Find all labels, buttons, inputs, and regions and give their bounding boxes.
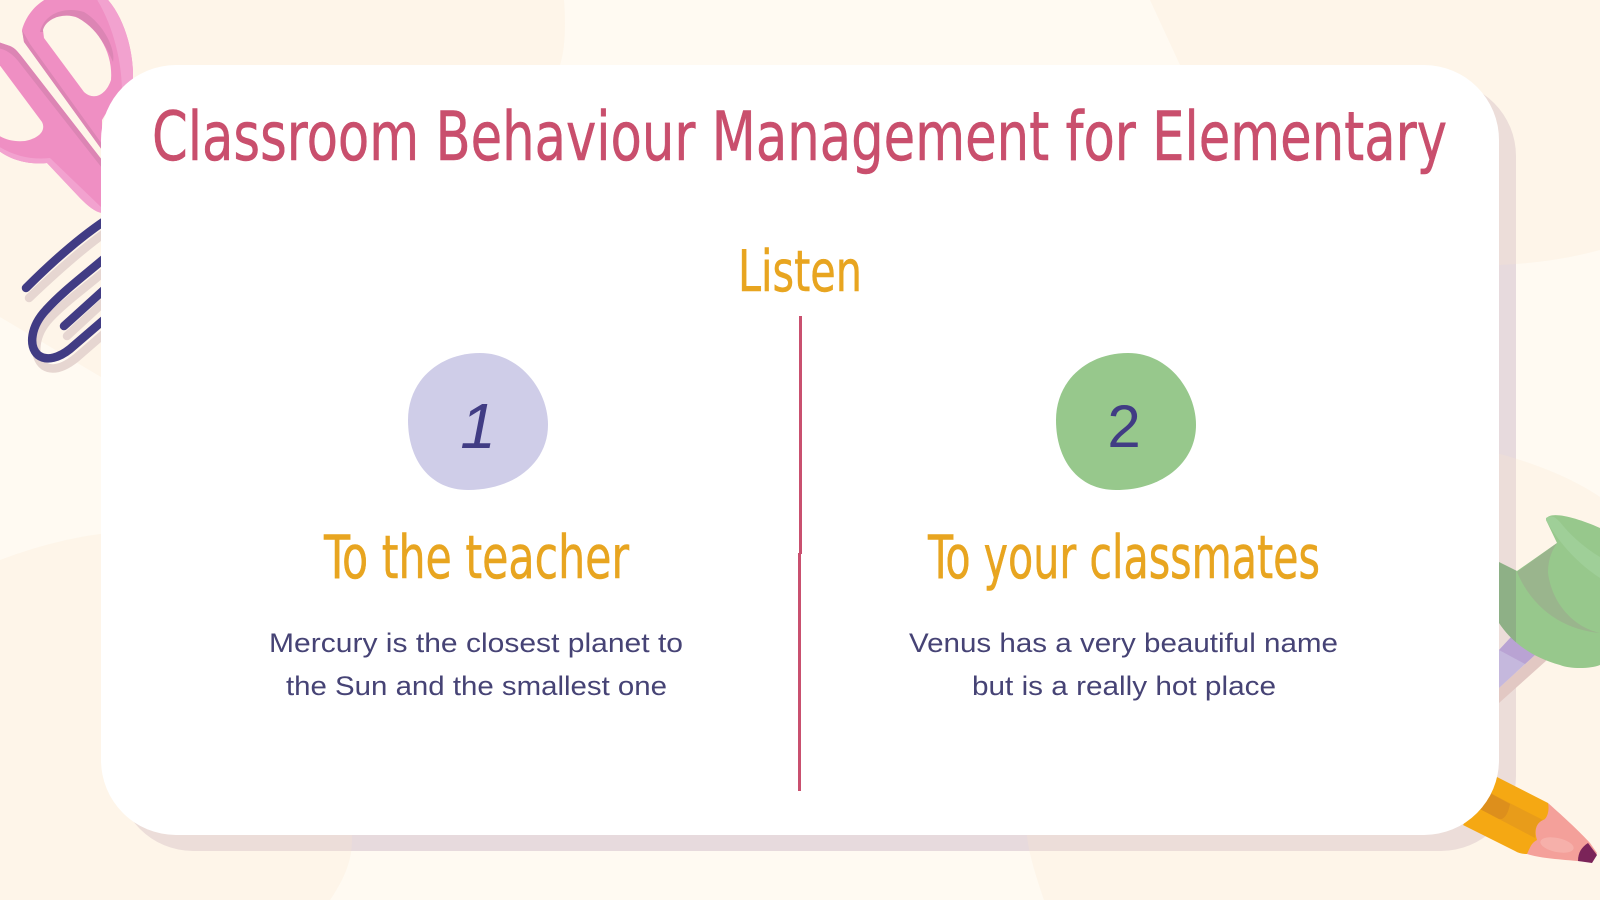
scissors upper handle light edge <box>92 0 133 92</box>
plant lid highlight <box>1546 516 1600 578</box>
paperclip <box>26 220 106 358</box>
icon: scissors <box>0 0 133 368</box>
scissors upper handle <box>22 0 133 150</box>
icon: pencil <box>1463 777 1597 863</box>
scissors lower handle light edge <box>0 146 102 213</box>
pencil dark band <box>1478 793 1510 819</box>
column: to the teacher <box>269 353 683 701</box>
description: but is a really hot place <box>972 671 1276 701</box>
divider line <box>798 316 802 791</box>
description <box>909 628 1338 701</box>
scissors lower handle hole <box>0 63 43 141</box>
pencil body stripe <box>1478 793 1543 838</box>
heading: to your classmates: To your classmates <box>927 523 1320 593</box>
column: to your classmates <box>909 353 1338 701</box>
heading: to the teacher: To the teacher <box>323 523 630 593</box>
pencil lead <box>1578 843 1597 863</box>
plant body <box>1499 515 1600 668</box>
card shadow <box>118 81 1516 851</box>
number 1: 1 <box>460 390 496 462</box>
icon: plant pot <box>1499 510 1600 703</box>
scissors upper handle edge shade <box>22 30 102 150</box>
scissors lower handle shade <box>0 42 102 168</box>
paperclip shadow <box>29 232 106 368</box>
pencil tip wood <box>1527 803 1597 862</box>
scissors lower handle <box>0 42 102 213</box>
heading: Listen: Listen <box>738 239 862 305</box>
number 2: 2 <box>1107 393 1141 460</box>
description: Mercury is the closest planet to <box>269 628 683 658</box>
pencil body <box>1463 777 1549 854</box>
plant stem shadow <box>1499 655 1547 703</box>
number blob 1 <box>408 353 548 490</box>
scissors upper handle inner shade <box>40 10 113 62</box>
description: the Sun and the smallest one <box>286 671 667 701</box>
number blob 2 <box>1056 353 1196 490</box>
pencil tip highlight <box>1539 835 1575 855</box>
scissors upper handle hole <box>43 16 111 96</box>
description <box>269 628 683 701</box>
plant body inner shadow <box>1517 543 1600 633</box>
panel: white card <box>101 65 1499 835</box>
shadow tint over plant <box>1499 562 1516 642</box>
plant stem <box>1499 636 1535 688</box>
plant stem band <box>1499 636 1535 664</box>
description: Venus has a very beautiful name <box>909 628 1338 658</box>
